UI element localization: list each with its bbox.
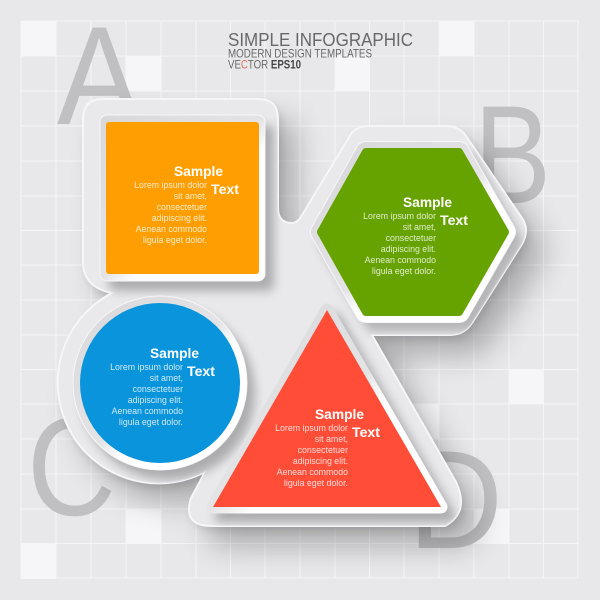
text: red panel: adipiscing elit. [293, 456, 348, 466]
panel: orange square [100, 115, 274, 291]
text: blue panel: Aenean commodo [112, 406, 183, 416]
text: blue panel: consectetuer [133, 384, 183, 394]
title block [228, 29, 413, 72]
text: red panel [275, 406, 380, 488]
panel: green hexagon [321, 152, 513, 322]
text: green panel: Sample [403, 194, 452, 210]
title block: MODERN DESIGN TEMPLATES [228, 46, 372, 60]
text: green panel: sit amet, [403, 222, 436, 232]
text: blue panel [110, 345, 215, 427]
panel: blue circle [73, 296, 255, 480]
letter A: A [57, 0, 142, 154]
text: red panel: sit amet, [315, 434, 348, 444]
text: green panel: Aenean commodo [365, 255, 436, 265]
text: orange panel: Sample [174, 163, 223, 179]
text: green panel: ligula eget dolor. [372, 266, 436, 276]
text: orange panel: Aenean commodo [136, 224, 207, 234]
text: orange panel: ligula eget dolor. [143, 235, 207, 245]
text: red panel: Sample [315, 406, 364, 422]
backing sheet [58, 99, 526, 526]
panel: red triangle [213, 310, 449, 516]
text: blue panel: sit amet, [150, 373, 183, 383]
text: red panel: ligula eget dolor. [284, 478, 348, 488]
text: orange panel [134, 163, 239, 245]
text: green panel [363, 194, 468, 276]
text: blue panel: Sample [150, 345, 199, 361]
text: green panel: Text [440, 212, 468, 228]
text: blue panel: Text [187, 363, 215, 379]
text: blue panel: Lorem ipsum dolor [110, 362, 183, 372]
text: green panel: consectetuer [386, 233, 436, 243]
text: orange panel: sit amet, [174, 191, 207, 201]
text: green panel: adipiscing elit. [381, 244, 436, 254]
text: orange panel: adipiscing elit. [152, 213, 207, 223]
title block: VECTOR EPS10 [228, 58, 301, 72]
letter C: C [27, 388, 116, 545]
text: red panel: Aenean commodo [277, 467, 348, 477]
text: orange panel: Lorem ipsum dolor [134, 180, 207, 190]
text: red panel: consectetuer [298, 445, 348, 455]
text: orange panel: consectetuer [157, 202, 207, 212]
letter D: D [408, 421, 503, 578]
text: orange panel: Text [211, 181, 239, 197]
text: red panel: Text [352, 424, 380, 440]
title block: SIMPLE INFOGRAPHIC [228, 29, 413, 50]
text: blue panel: adipiscing elit. [128, 395, 183, 405]
text: blue panel: ligula eget dolor. [119, 417, 183, 427]
text: green panel: Lorem ipsum dolor [363, 211, 436, 221]
backing sheet shadow [61, 104, 544, 546]
letter B: B [474, 76, 551, 233]
text: red panel: Lorem ipsum dolor [275, 423, 348, 433]
